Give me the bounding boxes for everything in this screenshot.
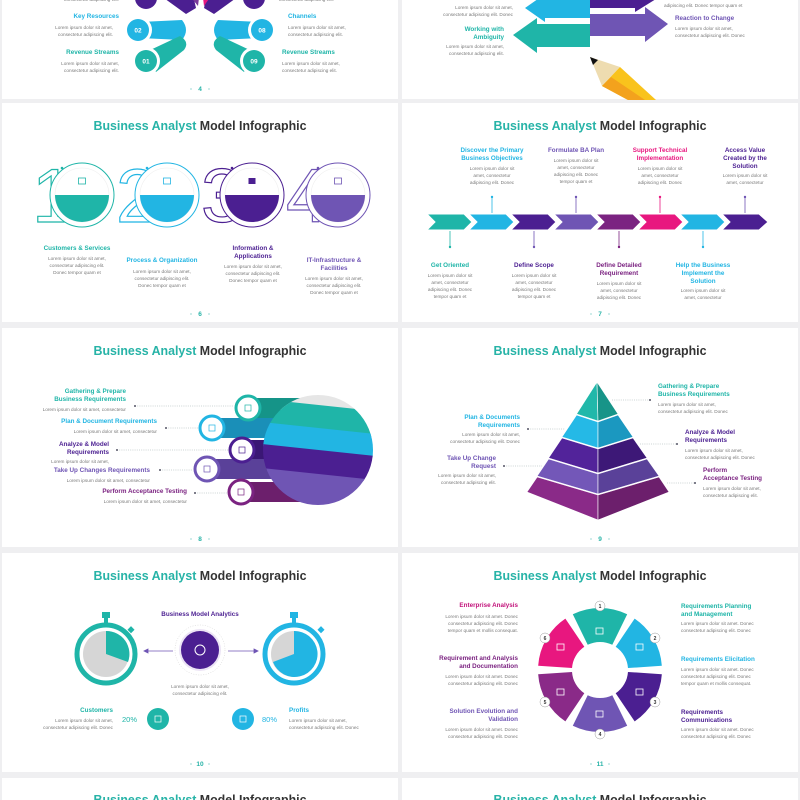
arrows <box>144 649 258 653</box>
labels: IT-Infrastructure & <box>307 257 362 264</box>
page number <box>190 86 210 93</box>
top labels: amet, consectetur <box>557 165 595 170</box>
center text: Lorem ipsum dolor sit amet, <box>171 684 229 689</box>
stopwatch left <box>77 612 135 683</box>
right labels: consectetur adipiscing elit. <box>703 493 758 498</box>
number badges: 4 <box>599 732 602 738</box>
left labels: Lorem ipsum dolor sit amet. Donec <box>445 614 519 619</box>
left labels: and Documentation <box>459 663 518 670</box>
profits: 80% <box>262 715 277 724</box>
labels: Donec tempor quam et <box>53 270 102 275</box>
labels: consectetur adipiscing elit. <box>226 271 280 276</box>
bottom labels: Lorem ipsum dolor sit <box>428 273 473 278</box>
dotted lines <box>117 406 234 493</box>
right labels <box>658 383 762 498</box>
page number: 11 <box>597 761 604 768</box>
labels: Lorem ipsum dolor sit amet, consectetur <box>74 429 157 434</box>
arrows <box>513 0 668 53</box>
bottom labels: Define Detailed <box>596 262 642 269</box>
right texts: Channels <box>288 13 317 20</box>
bottom labels: Define Scope <box>514 262 554 269</box>
right labels: Communications <box>681 717 733 724</box>
center icon <box>175 625 225 675</box>
labels: Donec tempor quam et <box>138 283 187 288</box>
left texts: Revenue Streams <box>66 49 119 56</box>
page number: 6 <box>198 311 202 318</box>
labels: Requirements <box>67 449 109 456</box>
left labels: Solution Evolution and <box>449 708 518 715</box>
customers <box>43 707 169 730</box>
title: Business Analyst Model Infographic <box>494 119 707 133</box>
customers: consectetur adipiscing elit. Donec <box>43 725 114 730</box>
number circles <box>124 0 276 75</box>
right labels: Requirements <box>685 437 727 444</box>
right labels: consectetur adipiscing elit. Donec <box>681 734 751 739</box>
pyramid <box>527 382 669 520</box>
top labels: Discover the Primary <box>460 147 524 154</box>
number badges: 3 <box>654 700 657 706</box>
number badges: 5 <box>544 700 547 706</box>
top labels: Implementation <box>637 155 683 162</box>
number circles: 09 <box>250 58 258 66</box>
labels: Lorem ipsum dolor sit amet, consectetur <box>43 407 126 412</box>
circle 1 <box>50 163 114 227</box>
top labels: Lorem ipsum dolor sit <box>723 173 768 178</box>
left texts: Lorem ipsum dolor sit amet, <box>55 25 113 30</box>
panel: slide 5 (partial top-right arrows): Reaction to Change <box>675 15 735 22</box>
labels: Lorem ipsum dolor sit amet, <box>48 256 106 261</box>
left labels: Enterprise Analysis <box>459 602 518 609</box>
page number <box>190 311 210 318</box>
title: Business Analyst Model Infographic <box>494 569 707 583</box>
connectors <box>449 196 746 248</box>
panel: slide 5 (partial top-right arrows) <box>443 0 745 100</box>
bottom labels: Lorem ipsum dolor sit <box>512 273 557 278</box>
left labels <box>438 414 521 485</box>
bottom labels: Lorem ipsum dolor sit <box>597 281 642 286</box>
bottom labels: amet, consectetur <box>600 288 638 293</box>
labels: Lorem ipsum dolor sit amet, <box>51 459 109 464</box>
top labels: Created by the <box>723 155 767 162</box>
right texts: consectetur adipiscing elit. <box>282 68 337 73</box>
labels: Donec tempor quam et <box>310 290 359 295</box>
left labels: Plan & Documents <box>464 414 520 421</box>
bottom labels: Implement the <box>682 270 725 277</box>
left labels: consectetur adipiscing elit. Donec <box>448 681 519 686</box>
right texts: Revenue Streams <box>282 49 335 56</box>
right labels: Lorem ipsum dolor sit amet. Donec <box>681 727 754 732</box>
right texts: Lorem ipsum dolor sit amet, <box>282 61 340 66</box>
page number: 10 <box>196 761 204 768</box>
right labels: Lorem ipsum dolor sit amet, <box>685 448 743 453</box>
texts <box>443 5 514 56</box>
labels: Donec tempor quam et <box>229 278 278 283</box>
right labels: consectetur adipiscing elit. Donec <box>681 628 751 633</box>
center text <box>171 684 229 696</box>
left labels: consectetur adipiscing elit. <box>441 480 496 485</box>
left labels: consectetur adipiscing elit. Donec <box>448 621 519 626</box>
customers: Customers <box>80 707 113 714</box>
labels: Lorem ipsum dolor sit amet, <box>224 264 282 269</box>
right labels: Requirements <box>681 709 723 716</box>
right labels: Perform <box>703 467 728 474</box>
left texts: Lorem ipsum dolor sit amet, <box>61 61 119 66</box>
left labels: consectetur adipiscing elit. Donec <box>450 439 521 444</box>
bottom labels: Solution <box>690 278 716 285</box>
right labels: consectetur adipiscing elit. Donec <box>685 455 755 460</box>
petals left <box>140 0 200 72</box>
texts: Lorem ipsum dolor sit amet, <box>446 44 504 49</box>
right labels: Gathering & Prepare <box>658 383 720 390</box>
page number: 7 <box>598 311 602 318</box>
bottom labels: amet, consectetur <box>684 295 722 300</box>
number badges: 2 <box>654 636 657 642</box>
labels: Lorem ipsum dolor sit amet, <box>305 276 363 281</box>
texts: Ambiguity <box>473 34 504 41</box>
top labels: adipiscing elit. Donec <box>470 180 515 185</box>
panel: slide 8 sphere <box>43 344 381 543</box>
left texts <box>55 0 119 73</box>
right labels: and Management <box>681 611 733 618</box>
right labels: Requirements Planning <box>681 603 751 610</box>
bottom labels: tempor quam et <box>518 294 551 299</box>
texts: consectetur adipiscing elit. Donec <box>443 12 514 17</box>
number circles: 08 <box>258 28 266 34</box>
profits: consectetur adipiscing elit. Donec <box>289 725 359 730</box>
labels: consectetur adipiscing elit. <box>135 276 189 281</box>
outlined digits: 4 <box>286 154 328 239</box>
panel: slide 5 (partial top-right arrows): adipiscing elit. Donec tempor quam et <box>664 3 743 8</box>
left labels: Requirements <box>478 422 520 429</box>
page number: 8 <box>198 536 202 543</box>
bottom labels: Get Oriented <box>431 262 469 269</box>
top labels <box>460 147 768 185</box>
bottom labels: Help the Business <box>676 262 731 269</box>
right labels <box>681 603 755 739</box>
bottom labels: amet, consectetur <box>431 280 469 285</box>
panel: slide 10 stopwatches <box>43 569 359 768</box>
texts: consectetur adipiscing elit. <box>449 51 504 56</box>
labels: Information & <box>233 245 274 252</box>
heading: Business Model Analytics <box>161 611 239 618</box>
top labels: Support Technical <box>633 147 687 154</box>
page number: 9 <box>598 536 602 543</box>
right labels: Lorem ipsum dolor sit amet. Donec <box>681 667 754 672</box>
left labels: consectetur adipiscing elit. Donec <box>448 734 519 739</box>
sphere <box>263 395 373 505</box>
title: Business Analyst Model Infographic <box>94 119 307 133</box>
right labels: Business Requirements <box>658 391 730 398</box>
left texts: Key Resources <box>73 13 119 20</box>
title: Business Analyst Model Infographic <box>94 569 307 583</box>
outlined digits <box>32 154 328 239</box>
labels: Facilities <box>321 265 348 272</box>
page number <box>190 761 210 768</box>
circle 3 <box>220 163 284 227</box>
labels: Lorem ipsum dolor sit amet, consectetur <box>104 499 187 504</box>
labels: consectetur adipiscing elit. <box>307 283 361 288</box>
right labels: Acceptance Testing <box>703 475 762 482</box>
right labels: consectetur adipiscing elit. Donec <box>681 674 751 679</box>
number circles: 01 <box>142 58 150 66</box>
segment icons <box>557 628 643 717</box>
chevrons <box>427 214 768 230</box>
bottom labels: adipiscing elit. Donec <box>428 287 473 292</box>
top labels: Solution <box>732 163 758 170</box>
labels: Plan & Document Requirements <box>61 418 157 425</box>
top labels: Lorem ipsum dolor sit <box>470 166 515 171</box>
top labels: amet, consectetur <box>641 173 679 178</box>
left labels: Lorem ipsum dolor sit amet, <box>462 432 520 437</box>
labels: Lorem ipsum dolor sit amet, <box>133 269 191 274</box>
page number <box>590 536 610 543</box>
page number: 4 <box>198 86 202 93</box>
right texts: Lorem ipsum dolor sit amet, <box>288 25 346 30</box>
panel: slide 9 pyramid <box>438 344 762 543</box>
number badges: 6 <box>544 636 547 642</box>
right labels: tempor quam et mollis consequat. <box>681 681 751 686</box>
icon: pencil <box>590 57 656 100</box>
right labels: Lorem ipsum dolor sit amet, <box>658 402 716 407</box>
icon circles <box>195 396 260 504</box>
left texts: consectetur adipiscing elit. <box>58 32 113 37</box>
customers: Lorem ipsum dolor sit amet, <box>55 718 113 723</box>
top labels: Access Value <box>725 147 766 154</box>
bottom labels <box>428 262 731 300</box>
left labels: Validation <box>488 716 518 723</box>
panel: slide 11 cycle <box>439 569 755 768</box>
title: Business Analyst Model Infographic <box>494 344 707 358</box>
panel: slide 7 chevron timeline <box>427 119 768 318</box>
dotted lines <box>504 400 695 483</box>
panel: slide 4 (partial top-left) <box>55 0 346 93</box>
stopwatch right <box>265 612 325 683</box>
panel: slide 5 (partial top-right arrows): consectetur adipiscing elit. Donec <box>675 33 745 38</box>
number circles: 02 <box>134 28 142 34</box>
outlined digits: 2 <box>116 154 158 239</box>
labels: Applications <box>234 253 272 260</box>
right texts: consectetur adipiscing elit. <box>288 32 343 37</box>
top labels: amet, consectetur <box>726 180 764 185</box>
top labels: Formulate BA Plan <box>548 147 604 154</box>
bottom labels: adipiscing elit. Donec <box>597 295 642 300</box>
labels: Analyze & Model <box>59 441 109 448</box>
left labels: Lorem ipsum dolor sit amet. Donec <box>445 674 519 679</box>
profits: Lorem ipsum dolor sit amet, <box>289 718 347 723</box>
panel: slide 6 numbered circles <box>32 119 370 318</box>
labels: Gathering & Prepare <box>65 388 126 395</box>
left labels <box>439 602 519 739</box>
left labels: Lorem ipsum dolor sit amet. Donec <box>445 727 519 732</box>
top labels: Business Objectives <box>461 155 523 162</box>
page number <box>590 761 610 768</box>
circle 4 <box>306 163 370 227</box>
center text: consectetur adipiscing elit. <box>173 691 227 696</box>
right labels: Analyze & Model <box>685 429 735 436</box>
texts: Working with <box>465 26 504 33</box>
left labels: Request <box>471 463 497 470</box>
left labels: Requirement and Analysis <box>439 655 518 662</box>
panel: slide 5 (partial top-right arrows): Lorem ipsum dolor sit amet, <box>675 26 733 31</box>
labels: Business Requirements <box>54 396 126 403</box>
labels: Lorem ipsum dolor sit amet, consectetur <box>67 478 150 483</box>
outlined digits: 3 <box>201 154 243 239</box>
panel: bottom partial titles <box>94 793 707 800</box>
labels <box>44 245 363 295</box>
right texts <box>279 0 346 73</box>
right labels: Lorem ipsum dolor sit amet, <box>703 486 761 491</box>
top labels: amet, consectetur <box>473 173 511 178</box>
left texts: consectetur adipiscing elit. <box>64 68 119 73</box>
right labels: Requirements Elicitation <box>681 656 755 663</box>
texts: Lorem ipsum dolor sit amet, <box>455 5 513 10</box>
bars <box>207 398 321 502</box>
labels: consectetur adipiscing elit. <box>50 263 104 268</box>
right labels: Lorem ipsum dolor sit amet. Donec <box>681 621 754 626</box>
circle 2 <box>135 163 199 227</box>
left labels: tempor quam et mollis consequat. <box>448 628 518 633</box>
right labels: consectetur adipiscing elit. Donec <box>658 409 728 414</box>
left labels: Take Up Change <box>447 455 496 462</box>
bottom labels: adipiscing elit. Donec <box>512 287 557 292</box>
left labels: Lorem ipsum dolor sit amet, <box>438 473 496 478</box>
outlined digits: 1 <box>32 154 74 239</box>
page number <box>590 311 610 318</box>
top labels: tempor quam et <box>560 179 593 184</box>
top labels: Lorem ipsum dolor sit <box>554 158 599 163</box>
bottom labels: Lorem ipsum dolor sit <box>681 288 726 293</box>
bottom labels: amet, consectetur <box>515 280 553 285</box>
customers: 20% <box>122 715 137 724</box>
labels: Customers & Services <box>44 245 111 252</box>
top labels: adipiscing elit. Donec <box>554 172 599 177</box>
labels: Process & Organization <box>126 257 198 264</box>
profits: Profits <box>289 707 309 714</box>
title: Business Analyst Model Infographic <box>94 344 307 358</box>
top labels: adipiscing elit. Donec <box>638 180 683 185</box>
page number <box>190 536 210 543</box>
number badges <box>540 601 660 739</box>
labels <box>43 388 187 504</box>
labels: Take Up Changes Requirements <box>54 467 150 474</box>
profits <box>232 707 359 730</box>
number badges: 1 <box>599 604 602 610</box>
cycle segments <box>533 608 667 732</box>
bottom labels: tempor quam et <box>434 294 467 299</box>
bottom labels: Requirement <box>600 270 639 277</box>
labels: Perform Acceptance Testing <box>102 488 187 495</box>
top labels: Lorem ipsum dolor sit <box>638 166 683 171</box>
petals right <box>202 0 260 72</box>
